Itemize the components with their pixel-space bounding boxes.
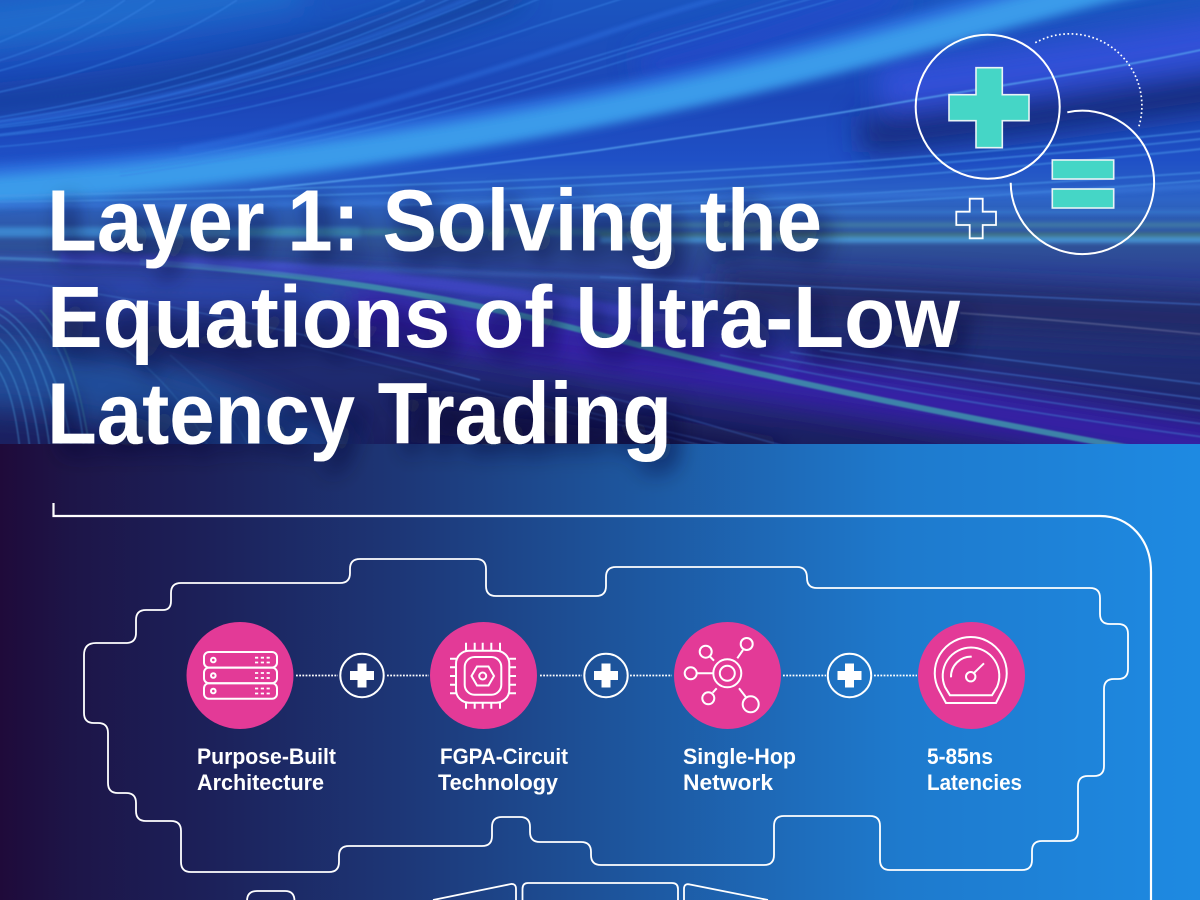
- label: Purpose-Built Architecture: Architecture: [197, 770, 324, 795]
- label: 5-85ns Latencies: 5-85ns: [927, 744, 993, 769]
- outer frame line: [54, 503, 1151, 900]
- label: Purpose-Built Architecture: Purpose-Built: [197, 744, 337, 769]
- title: Equations of Ultra-Low: [47, 269, 960, 366]
- label: FGPA-Circuit Technology: FGPA-Circuit: [440, 744, 569, 769]
- label: 5-85ns Latencies: Latencies: [927, 770, 1022, 795]
- icon: hub network: [674, 622, 781, 729]
- plus connector 3: [828, 654, 871, 697]
- bright band: [0, 0, 1017, 178]
- title: [47, 172, 960, 462]
- title: Latency Trading: [47, 366, 672, 462]
- thin lines lower right: [0, 277, 1200, 452]
- label: 5-85ns Latencies: [927, 744, 1022, 795]
- label: Single-Hop Network: [683, 744, 796, 795]
- horizontal streaks with green tint: [0, 186, 1200, 280]
- icon: plus and equals graphic: [916, 34, 1154, 254]
- diagonal teal streak: [140, 262, 1130, 448]
- icon: server stack: [186, 622, 294, 729]
- hero background: light streaks: [0, 0, 1200, 470]
- title: Layer 1: Solving the: [47, 172, 822, 270]
- top fan lines: [0, 0, 900, 176]
- label: FGPA-Circuit Technology: Technology: [438, 770, 559, 795]
- inner circuit outline: [84, 559, 1128, 872]
- plus connector 2: [584, 654, 628, 697]
- icon: FPGA chip: [430, 622, 537, 729]
- label: Single-Hop Network: Network: [683, 770, 774, 795]
- icon: latency gauge: [918, 622, 1025, 729]
- icon: small outlined plus: [956, 199, 996, 238]
- lower gradient panel: [0, 444, 1200, 900]
- dotted connectors: [296, 674, 917, 676]
- fine streak through the mid-right: [250, 48, 1200, 190]
- lower circuit outlines, cropped at page edge: [247, 883, 768, 900]
- icon: circle with large plus: [916, 35, 1060, 179]
- label: Single-Hop Network: Single-Hop: [683, 744, 796, 769]
- bottom-left fan: [0, 300, 250, 450]
- label: FGPA-Circuit Technology: [438, 744, 569, 795]
- icon: dotted arc: [1035, 34, 1142, 128]
- label: Purpose-Built Architecture: [197, 744, 337, 795]
- icon: arc with equals sign: [1011, 111, 1154, 254]
- plus connector 1: [340, 654, 384, 697]
